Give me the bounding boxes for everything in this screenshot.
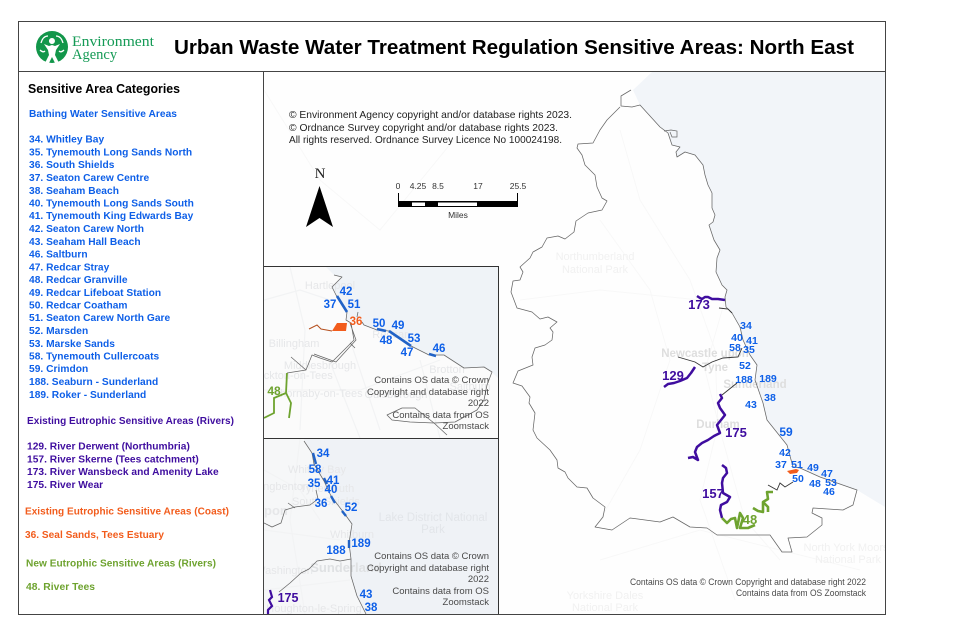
inset attribution: 2022	[468, 398, 489, 409]
scale bar: 4.25	[410, 181, 427, 191]
copyright: © Environment Agency copyright and/or database rights 2023.	[289, 109, 572, 121]
inset labels: 38	[365, 602, 378, 614]
map labels: 35	[743, 344, 755, 356]
inset place labels: Redcar	[372, 329, 408, 341]
inset river wear	[268, 590, 272, 614]
logo: Environment Agency	[36, 31, 154, 63]
inset labels: 46	[433, 343, 445, 355]
inset attribution: Contains data from OS	[392, 410, 489, 421]
inset place labels: Whitley Bay	[288, 464, 347, 476]
new eutrophic heading: New Eutrophic Sensitive Areas (Rivers)	[26, 558, 216, 570]
eutrophic rivers list: 173. River Wansbeck and Amenity Lake	[27, 467, 219, 478]
bathing water list: 188. Seaburn - Sunderland	[29, 377, 158, 388]
north arrow	[306, 166, 333, 227]
bathing water list: 35. Tynemouth Long Sands North	[29, 148, 192, 158]
inset seal sands	[309, 323, 347, 331]
inset attribution: Copyright and database right	[367, 563, 489, 574]
place labels: Sunderland	[723, 379, 787, 391]
new eutrophic item: 48. River Tees	[26, 582, 95, 593]
sea	[633, 72, 885, 507]
map labels: 48	[809, 478, 821, 490]
map labels: 129	[662, 368, 684, 383]
inset place labels	[247, 280, 490, 401]
scale bar	[396, 183, 526, 218]
inset coast	[287, 275, 492, 435]
inset labels: 40	[325, 484, 337, 496]
bathing water list: 47. Redcar Stray	[29, 262, 110, 274]
main map	[264, 72, 889, 614]
place labels: North York Moors	[804, 542, 889, 554]
map labels: 34	[740, 320, 752, 332]
inset place labels: upon	[256, 503, 288, 518]
inset labels: 53	[408, 333, 420, 345]
eutrophic rivers list: 129. River Derwent (Northumbria)	[27, 442, 190, 452]
region boundary	[511, 90, 857, 552]
place labels	[556, 251, 889, 614]
copyright	[289, 109, 572, 146]
inset place labels: Longbenton	[251, 481, 309, 493]
map labels: 157	[702, 486, 724, 501]
inset labels: 188	[326, 545, 346, 557]
scale bar: 8.5	[432, 181, 444, 191]
map labels: 46	[823, 486, 835, 498]
inset labels: 34	[317, 448, 330, 460]
eutrophic coast item: 36. Seal Sands, Tees Estuary	[25, 530, 164, 541]
inset attribution: Contains OS data © Crown	[374, 551, 489, 562]
faint roads	[264, 90, 860, 600]
bathing water list: 41. Tynemouth King Edwards Bay	[29, 211, 194, 222]
map labels: 175	[725, 425, 747, 440]
river tyne and lines	[678, 308, 793, 490]
map labels: 38	[764, 392, 776, 404]
inset labels: 52	[345, 502, 357, 514]
inset place labels: Sunderland	[310, 560, 382, 575]
bathing water list: 51. Seaton Carew North Gare	[29, 313, 171, 324]
map labels: 188	[735, 374, 753, 386]
inset: Tees	[247, 266, 498, 438]
place labels: National Park	[572, 602, 639, 614]
inset place labels: South Shields	[292, 496, 360, 508]
eutrophic rivers list: 157. River Skerne (Tees catchment)	[27, 454, 199, 466]
bathing water list: 37. Seaton Carew Centre	[29, 173, 149, 184]
inset labels: 175	[278, 591, 298, 605]
inset: Tyne and Wear	[251, 439, 498, 615]
bathing water list: 48. Redcar Granville	[29, 275, 128, 286]
inset labels: 43	[360, 589, 372, 601]
place labels: National Park	[815, 554, 882, 566]
attribution: Contains OS data © Crown Copyright and database right 2022	[630, 577, 866, 588]
inset place labels: Brotton	[429, 364, 465, 376]
place labels: Northumberland	[556, 251, 634, 263]
map labels: 49	[807, 462, 819, 474]
eutrophic rivers list: 175. River Wear	[27, 480, 103, 491]
map labels: 43	[745, 399, 757, 411]
inset attribution	[367, 551, 489, 608]
inset labels: 48	[267, 384, 281, 398]
inset labels: 36	[350, 316, 362, 328]
bathing water list: 59. Crimdon	[29, 364, 88, 375]
place labels: Yorkshire Dales	[567, 590, 644, 602]
inset attribution: 2022	[468, 574, 489, 585]
bathing water list: 46. Saltburn	[29, 250, 88, 260]
scale bar: 17	[473, 181, 483, 191]
inset roads	[264, 439, 350, 614]
map labels: 58	[729, 342, 741, 354]
inset labels	[278, 448, 378, 614]
map labels: 59	[779, 425, 793, 439]
map labels: 48	[743, 512, 757, 527]
map labels: 40	[731, 332, 743, 344]
logo: Environment Agency: Agency	[72, 47, 118, 63]
inset attribution: Contains OS data © Crown	[374, 375, 489, 386]
map labels: 42	[779, 447, 791, 459]
map labels: 173	[688, 297, 710, 312]
inset labels: 49	[392, 320, 404, 332]
place labels: Durham	[696, 419, 740, 431]
inset place labels: Tynemouth	[300, 483, 354, 495]
bathing water list: 58. Tynemouth Cullercoats	[29, 352, 160, 362]
inset place labels: Middlesbrough	[284, 360, 356, 372]
inset sea and land	[304, 439, 498, 614]
scale bar: 0	[396, 181, 401, 191]
attribution: Contains data from OS Zoomstack	[736, 588, 866, 599]
bathing water list: 42. Seaton Carew North	[29, 224, 144, 235]
eutrophic coast heading: Existing Eutrophic Sensitive Areas (Coast)	[25, 506, 229, 518]
inset attribution: Zoomstack	[443, 421, 489, 432]
bathing water heading: Bathing Water Sensitive Areas	[29, 109, 177, 120]
inset place labels: Saltburn	[450, 381, 490, 393]
map labels	[662, 297, 837, 527]
map labels: 50	[792, 473, 804, 485]
inset labels: 36	[315, 498, 327, 510]
bathing water list: 43. Seaham Hall Beach	[29, 237, 141, 248]
inset place labels: Houghton-le-Spring	[266, 603, 362, 615]
map labels: 51	[791, 459, 803, 471]
offshore islands	[664, 130, 677, 137]
river tees	[722, 492, 773, 528]
inset place labels: Park	[421, 524, 445, 536]
inset roads	[264, 267, 440, 438]
bathing water list	[29, 134, 194, 401]
inset attribution: Copyright and database right	[367, 387, 489, 398]
bathing water list: 38. Seaham Beach	[29, 186, 119, 197]
eutrophic rivers list	[27, 442, 219, 491]
map labels: 189	[759, 373, 777, 385]
inset labels: 41	[327, 475, 340, 487]
place labels: Tyne	[702, 362, 728, 374]
inset labels: 42	[340, 286, 352, 298]
inset labels: 48	[380, 335, 393, 347]
inset labels: 51	[348, 299, 361, 311]
eutrophic rivers heading: Existing Eutrophic Sensitive Areas (Rivers)	[27, 416, 234, 427]
map labels: 37	[775, 459, 787, 471]
bathing water list: 52. Marsden	[29, 326, 88, 337]
bathing water list: 50. Redcar Coatham	[29, 300, 128, 312]
map labels: 47	[821, 468, 833, 480]
inset borders	[264, 266, 498, 614]
copyright: All rights reserved. Ordnance Survey Licence No 100024198.	[289, 134, 562, 146]
title: Urban Waste Water Treatment Regulation Sensitive Areas: North East	[174, 36, 854, 59]
copyright: © Ordnance Survey copyright and/or database rights 2023.	[289, 122, 558, 134]
bathing water list: 36. South Shields	[29, 160, 115, 171]
legend heading: Sensitive Area Categories	[28, 82, 180, 96]
inset place labels	[251, 464, 487, 615]
inset coast	[264, 441, 366, 614]
attribution	[630, 578, 866, 596]
inset labels: 58	[309, 464, 322, 476]
bathing water list: 53. Marske Sands	[29, 339, 115, 350]
seal sands	[787, 469, 799, 474]
inset place labels: Washington	[255, 565, 313, 577]
map labels: 41	[746, 335, 758, 347]
map labels: 53	[825, 477, 837, 489]
inset attribution: Contains data from OS	[392, 586, 489, 597]
inset labels: 37	[324, 299, 336, 311]
inset bathing waters	[313, 453, 349, 548]
inset sea	[325, 266, 498, 378]
bathing water list: 49. Redcar Lifeboat Station	[29, 288, 161, 299]
inset labels	[267, 286, 445, 398]
inset place labels: Guisborough	[364, 389, 428, 401]
inset place labels: Hartlepool	[305, 280, 355, 292]
map labels: 52	[739, 360, 751, 372]
inset river tees	[264, 373, 291, 418]
place labels: Newcastle upon	[661, 348, 749, 360]
scale bar: Miles	[448, 210, 468, 220]
bathing water list: 189. Roker - Sunderland	[29, 390, 146, 401]
bathing water list: 40. Tynemouth Long Sands South	[29, 198, 194, 210]
logo: Environment Agency: Environment	[72, 34, 154, 50]
inset labels: 50	[373, 318, 385, 330]
place labels: National Park	[562, 264, 629, 276]
inset place labels: Thornaby-on-Tees	[273, 388, 363, 400]
inset labels: 189	[351, 538, 371, 550]
bathing water list: 34. Whitley Bay	[29, 134, 104, 146]
scale bar: 25.5	[510, 181, 527, 191]
inset labels: 47	[401, 347, 413, 359]
legend panel	[25, 82, 234, 593]
inset labels: 35	[308, 478, 321, 490]
inset place labels: Stockton-on-Tees	[247, 370, 333, 382]
inset place labels: Lake District National	[379, 512, 487, 524]
inset attribution: Zoomstack	[443, 597, 489, 608]
rivers existing eutrophic	[664, 296, 730, 518]
inset place labels: Billingham	[269, 338, 319, 350]
north arrow: N	[315, 166, 326, 182]
inset bathing waters	[337, 296, 436, 356]
inset attribution	[367, 375, 489, 432]
inset place labels: Whitburn	[330, 529, 374, 541]
